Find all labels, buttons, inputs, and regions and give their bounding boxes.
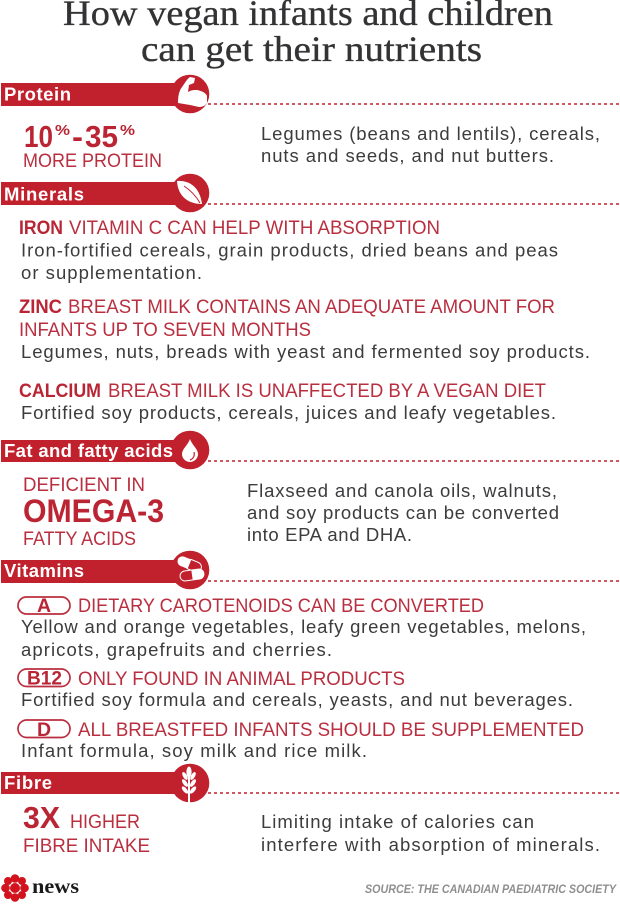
vitamin a: [18, 595, 586, 660]
omega-3 stat: FATTY ACIDS: [23, 528, 136, 550]
vitamin b12: Fortified soy formula and cereals, yeasts, and nut beverages.: [21, 689, 573, 710]
fibre note: [261, 811, 600, 855]
panel: protein: [1, 75, 620, 172]
badge: B12: [18, 668, 70, 690]
icon: capsules: [176, 555, 205, 582]
omega-3 stat: OMEGA-3: [23, 493, 164, 529]
badge: D: [18, 719, 70, 741]
icon: oil drop: [182, 439, 198, 462]
zinc: Legumes, nuts, breads with yeast and fermented soy products.: [21, 341, 590, 362]
calcium: Fortified soy products, cereals, juices and leafy vegetables.: [21, 402, 556, 423]
iron: [19, 217, 558, 283]
fibre stat: 3X: [23, 800, 60, 835]
calcium: CALCIUM: [19, 380, 101, 402]
logo: cbc news: news: [32, 876, 79, 898]
minerals header: Minerals: [4, 184, 84, 204]
panel: minerals: [1, 174, 620, 423]
icon: wheat: [181, 766, 197, 803]
fat sources: Flaxseed and canola oils, walnuts,: [247, 480, 557, 501]
fat sources: [247, 480, 559, 545]
fibre note: interfere with absorption of minerals.: [261, 834, 600, 855]
fat sources: and soy products can be converted: [247, 502, 559, 523]
vitamin d: Infant formula, soy milk and rice milk.: [21, 740, 367, 761]
vitamin d: [18, 719, 584, 761]
protein header: [1, 75, 620, 113]
fibre header: [1, 764, 620, 803]
iron: Iron-fortified cereals, grain products, dried beans and peas: [21, 240, 558, 260]
vitamin a: apricots, grapefruits and cherries.: [21, 639, 332, 660]
iron: or supplementation.: [21, 262, 202, 283]
vitamin b12: [18, 668, 573, 710]
icon: cbc gem: [1, 874, 29, 902]
omega-3 stat: DEFICIENT IN: [23, 474, 145, 496]
vitamins header: [1, 551, 620, 589]
fibre stat: [23, 800, 150, 857]
panel: fibre: [1, 764, 620, 857]
icon: flexed arm: [178, 77, 207, 107]
panel: vitamins: [1, 551, 620, 761]
vitamin d: ALL BREASTFED INFANTS SHOULD BE SUPPLEMENTED: [78, 719, 584, 741]
zinc: ZINC: [19, 296, 62, 318]
zinc: INFANTS UP TO SEVEN MONTHS: [19, 319, 311, 341]
fibre note: Limiting intake of calories can: [261, 811, 534, 832]
fat sources: into EPA and DHA.: [247, 524, 412, 545]
fibre stat: FIBRE INTAKE: [23, 835, 150, 857]
protein stat: 10: [24, 119, 53, 154]
protein stat: %: [55, 122, 70, 139]
badge: D: D: [37, 719, 51, 741]
protein stat: 35: [85, 119, 118, 154]
fat header: [1, 431, 620, 469]
iron: VITAMIN C CAN HELP WITH ABSORPTION: [69, 217, 440, 239]
fat header: Fat and fatty acids: [4, 440, 173, 461]
logo: cbc news: [1, 874, 79, 902]
zinc: BREAST MILK CONTAINS AN ADEQUATE AMOUNT FOR: [68, 296, 555, 318]
omega-3 stat: [23, 474, 164, 550]
iron: IRON: [19, 217, 63, 239]
vitamin a: Yellow and orange vegetables, leafy green vegetables, melons,: [21, 616, 586, 637]
protein sources: [261, 123, 600, 166]
vitamins header: Vitamins: [4, 560, 84, 581]
protein stat: %: [120, 122, 135, 139]
protein stat: MORE PROTEIN: [23, 150, 162, 172]
title: can get their nutrients: [141, 29, 482, 69]
badge: B12: B12: [27, 668, 62, 690]
fibre header: Fibre: [4, 772, 52, 793]
zinc: [19, 296, 590, 362]
protein sources: Legumes (beans and lentils), cereals,: [261, 123, 600, 144]
badge: A: [18, 595, 70, 617]
calcium: [19, 380, 556, 423]
protein stat: [23, 119, 162, 172]
protein header: Protein: [4, 84, 71, 104]
title: [63, 0, 553, 69]
fibre stat: HIGHER: [70, 811, 140, 833]
protein stat: -: [72, 119, 83, 154]
vitamin a: DIETARY CAROTENOIDS CAN BE CONVERTED: [78, 595, 484, 617]
protein sources: nuts and seeds, and nut butters.: [261, 145, 554, 166]
calcium: BREAST MILK IS UNAFFECTED BY A VEGAN DIET: [108, 380, 546, 402]
panel: fat and fatty acids: [1, 431, 620, 550]
minerals header: [1, 174, 620, 212]
icon: leaf: [177, 181, 202, 204]
vitamin b12: ONLY FOUND IN ANIMAL PRODUCTS: [78, 668, 405, 690]
badge: A: A: [37, 595, 51, 617]
